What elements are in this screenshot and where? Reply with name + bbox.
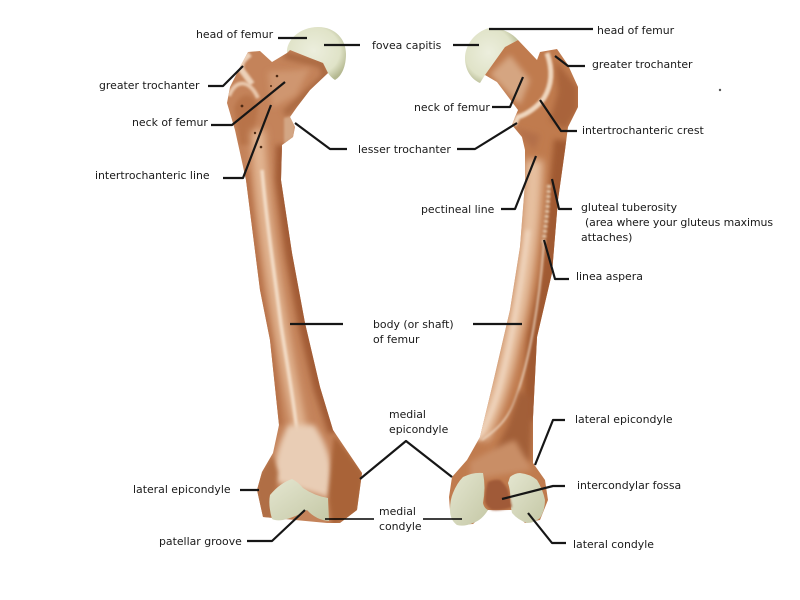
labels: right femur: gluteal tuberosity (581, 201, 678, 214)
labels: right femur: pectineal line (421, 203, 495, 216)
right medial condyle (450, 473, 488, 526)
leader lines: right femur (360, 29, 593, 543)
labels: right femur: linea aspera (576, 270, 643, 283)
labels: center: body (or shaft) (373, 318, 454, 331)
labels: right femur: greater trochanter (592, 58, 693, 71)
labels: right femur: lateral epicondyle (575, 413, 673, 426)
labels: left femur: head of femur (196, 28, 274, 41)
left femur foramina (241, 75, 278, 148)
left lower end shading (275, 425, 332, 498)
left shaft shading (282, 145, 335, 432)
labels: center (373, 318, 454, 533)
labels: left femur: fovea capitis (372, 39, 442, 52)
right intercondylar fossa (485, 480, 512, 510)
right femur bone body (449, 40, 578, 525)
labels: right femur: neck of femur (414, 101, 490, 114)
labels: left femur: neck of femur (132, 116, 208, 129)
labels: right femur: intertrochanteric crest (582, 124, 705, 137)
right shaft shading (530, 140, 562, 420)
labels: center: medial (379, 505, 416, 518)
left femur (anterior view) (227, 27, 362, 523)
labels: left femur: patellar groove (159, 535, 242, 548)
labels: right femur: (area where your gluteus maximus (585, 216, 773, 229)
labels: center: condyle (379, 520, 422, 533)
leader lines: left femur (208, 38, 374, 541)
labels: left femur: intertrochanteric line (95, 169, 210, 182)
left femur bone body (227, 50, 362, 523)
right lateral condyle (508, 473, 545, 523)
right femur (posterior view) (449, 28, 578, 526)
left head of femur (287, 27, 346, 80)
right head of femur (465, 28, 518, 83)
stray speck (719, 89, 721, 91)
labels: right femur: lateral condyle (573, 538, 654, 551)
labels: right femur: attaches) (581, 231, 632, 244)
labels: center: medial (389, 408, 426, 421)
labels: right femur: head of femur (597, 24, 675, 37)
labels: left femur (95, 28, 451, 548)
labels: left femur: lesser trochanter (358, 143, 451, 156)
labels: center: epicondyle (389, 423, 449, 436)
femur anatomy diagram (96, 26, 772, 550)
labels: right femur (414, 24, 773, 551)
labels: left femur: lateral epicondyle (133, 483, 231, 496)
left patellar surface (269, 479, 329, 521)
labels: right femur: intercondylar fossa (577, 479, 681, 492)
labels: left femur: greater trochanter (99, 79, 200, 92)
labels: center: of femur (373, 333, 420, 346)
